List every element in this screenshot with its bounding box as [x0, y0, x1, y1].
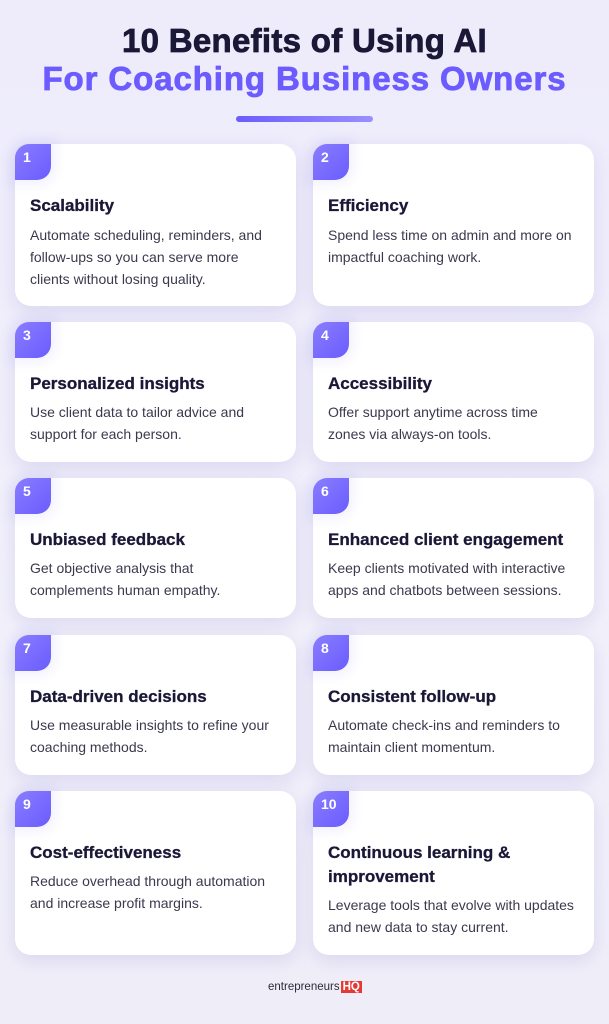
- card 3: [15, 322, 296, 462]
- card 3: Personalized insights: [30, 374, 205, 393]
- card 3: 3: [23, 327, 31, 343]
- card 2: [313, 144, 594, 306]
- card 10: [313, 791, 594, 955]
- title line 1: 10 Benefits of Using AI: [122, 22, 487, 59]
- card 5: [15, 478, 296, 618]
- card 9: Cost-effectiveness: [30, 843, 181, 862]
- card 7: Data-driven decisions: [30, 687, 207, 706]
- card 4: 4: [321, 327, 329, 343]
- footer logo: entrepreneurs HQ: [268, 981, 360, 993]
- card 5: 5: [23, 483, 31, 499]
- card 6: Enhanced client engagement: [328, 530, 563, 549]
- card 6: 6: [321, 483, 329, 499]
- card 9: [15, 791, 296, 955]
- card 5: Unbiased feedback: [30, 530, 185, 549]
- card 2: Spend less time on admin and more on impactful coaching work.: [328, 227, 572, 265]
- card 1: Scalability: [30, 196, 114, 215]
- title line 2: For Coaching Business Owners: [42, 60, 566, 97]
- card 9: 9: [23, 796, 31, 812]
- card 2: Efficiency: [328, 196, 408, 215]
- card 7: Use measurable insights to refine your coaching methods.: [30, 717, 269, 755]
- card 1: [15, 144, 296, 306]
- card 3: Use client data to tailor advice and support for each person.: [30, 404, 244, 442]
- card 6: [313, 478, 594, 618]
- card 5: Get objective analysis that complements human empathy.: [30, 560, 220, 598]
- card 8: 8: [321, 640, 329, 656]
- card 7: [15, 635, 296, 775]
- card 7: 7: [23, 640, 31, 656]
- card 1: 1: [23, 149, 31, 165]
- card 9: Reduce overhead through automation and increase profit margins.: [30, 873, 265, 911]
- card 6: Keep clients motivated with interactive apps and chatbots between sessions.: [328, 560, 565, 598]
- card 4: [313, 322, 594, 462]
- card 2: 2: [321, 149, 329, 165]
- card 4: Accessibility: [328, 374, 432, 393]
- card 10: Leverage tools that evolve with updates and new data to stay current.: [328, 897, 574, 935]
- title underline: [236, 116, 373, 122]
- card 10: 10: [321, 796, 337, 812]
- card 1: Automate scheduling, reminders, and follow-ups so you can serve more clients without losing quality.: [30, 227, 262, 287]
- card 8: Automate check-ins and reminders to maintain client momentum.: [328, 717, 560, 755]
- card 10: Continuous learning & improvement: [328, 843, 510, 886]
- card 8: Consistent follow-up: [328, 687, 496, 706]
- card 4: Offer support anytime across time zones via always-on tools.: [328, 404, 538, 442]
- card 8: [313, 635, 594, 775]
